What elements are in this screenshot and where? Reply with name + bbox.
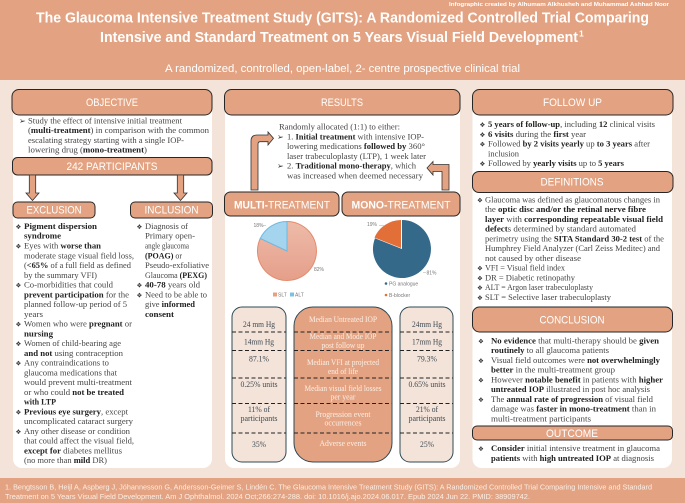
heading: follow up: FOLLOW UP xyxy=(543,97,602,109)
follow up list: ❖ xyxy=(480,121,486,129)
definitions list: ❖ xyxy=(477,196,483,204)
definitions list: DR = Diabetic retinopathy xyxy=(485,272,576,282)
exclusion criteria list: Any contraindications to xyxy=(24,358,110,368)
exclusion criteria list: Previous eye surgery, except xyxy=(24,406,129,416)
title: Intensive and Standard Treatment on 5 Years Visual Field Development xyxy=(100,29,578,46)
outcome text xyxy=(478,443,660,463)
exclusion criteria list: and not using contraception xyxy=(24,348,124,358)
conclusion list: However notable benefit in patients with higher xyxy=(491,374,663,384)
table column: mono-treatment values: 24mm Hg xyxy=(412,319,443,329)
exclusion criteria list: Eyes with worse than xyxy=(24,240,101,250)
pie chart: multi-treatment: 82% xyxy=(314,267,325,273)
arrow: mono-treatment to option 2 xyxy=(427,162,449,190)
definitions list: perimetry using the SITA Standard 30-2 test of the xyxy=(485,233,664,243)
outcome text: Consider initial intensive treatment in glaucoma xyxy=(491,443,660,453)
table column: multi-treatment values: participants xyxy=(240,413,278,423)
follow up list: Followed by 2 visits yearly up to 3 years after xyxy=(488,138,650,148)
heading: objective: OBJECTIVE xyxy=(86,97,138,109)
panel: objective and participants xyxy=(12,90,212,468)
follow up list: 6 visits during the first year xyxy=(488,129,586,139)
table column: outcome labels: Median VFI at projected xyxy=(307,357,380,367)
inclusion criteria list: Diagnosis of xyxy=(145,221,188,231)
title: 1 xyxy=(579,28,584,38)
exclusion criteria list: except for diabetes mellitus xyxy=(24,445,123,455)
pie chart: mono-treatment: 81% xyxy=(426,270,437,276)
exclusion criteria list xyxy=(16,221,134,465)
follow up list: ❖ xyxy=(480,160,486,168)
pie chart: mono-treatment: 19% xyxy=(367,222,378,228)
table column: mono-treatment values: 0.65% units xyxy=(408,379,446,389)
exclusion criteria list: ❖ xyxy=(16,320,22,328)
credit line: Infographic created by Alhumam Alkhusheh and Muhammad Ashhad Noor xyxy=(449,2,670,8)
heading: mono-treatment xyxy=(342,192,460,216)
exclusion criteria list: years xyxy=(24,309,44,319)
pie chart: mono-treatment: B-blocker xyxy=(389,293,410,299)
conclusion list: untreated IOP illustrated in post hoc analysis xyxy=(491,384,651,394)
exclusion criteria list: Any other disease or condition xyxy=(24,426,131,436)
exclusion criteria list: Pigment dispersion xyxy=(24,221,97,231)
inclusion criteria list: angle glaucoma xyxy=(145,240,189,250)
heading: conclusion: CONCLUSION xyxy=(540,314,605,326)
objective text: Study the effect of intensive initial treatment xyxy=(28,115,183,125)
table column: outcome labels: Adverse events xyxy=(320,438,367,448)
arrow: to exclusion xyxy=(26,175,39,200)
exclusion criteria list: Women of child-bearing age xyxy=(24,338,121,348)
arrow: multi-treatment to option 1 xyxy=(251,132,274,190)
follow up list: ❖ xyxy=(480,140,486,148)
table column: outcome labels xyxy=(294,307,392,462)
table column: outcome labels: Progression event xyxy=(316,409,371,419)
exclusion criteria list: moderate stage visual field loss, xyxy=(24,250,134,260)
table column: outcome labels: per year xyxy=(330,392,356,402)
header banner xyxy=(0,0,685,80)
arrow: to inclusion xyxy=(174,175,187,200)
objective text: escalating strategy starting with a single IOP- xyxy=(28,135,184,145)
exclusion criteria list: Women who were pregnant or xyxy=(24,318,132,328)
definitions list: layer with corresponding repeatable visual field xyxy=(485,214,663,224)
randomisation text: lowering medications followed by 360° xyxy=(287,141,426,151)
table column: multi-treatment values: 0.25% units xyxy=(240,379,278,389)
randomisation text: Randomly allocated (1:1) to either: xyxy=(279,122,400,132)
conclusion list: multi-treatment participants xyxy=(491,413,592,423)
exclusion criteria list: prevent participation for the xyxy=(24,289,129,299)
objective text: lowering drug (mono-treatment) xyxy=(28,145,147,155)
definitions list: SLT = Selective laser trabeculoplasty xyxy=(485,292,612,302)
definitions list xyxy=(477,194,664,302)
inclusion criteria list: 40-78 years old xyxy=(145,280,201,290)
conclusion list: ❖ xyxy=(478,357,484,365)
table column: outcome labels: end of life xyxy=(328,366,358,376)
inclusion criteria list: consent xyxy=(145,309,174,319)
exclusion criteria list: that could affect the visual field, xyxy=(24,436,134,446)
conclusion list: routinely to all glaucoma patients xyxy=(491,345,610,355)
conclusion list: ❖ xyxy=(478,337,484,345)
panel: results xyxy=(224,90,460,468)
exclusion criteria list: with LTP xyxy=(24,396,57,406)
table column: outcome labels: Median Untreated IOP xyxy=(309,314,377,324)
randomisation text: laser trabeculoplasty (LTP), 1 week later xyxy=(287,151,426,161)
exclusion criteria list: nursing xyxy=(24,328,54,338)
footer citation: 1. Bengtsson B, Heijl A, Aspberg J, Jóhannesson G, Andersson-Geimer S, Lindén C. The Glaucoma Intensive Treatment Study (GITS): A Randomized Controlled Trial Comparing Intensive and Standard xyxy=(5,484,652,492)
definitions list: ❖ xyxy=(477,274,483,282)
inclusion criteria list xyxy=(136,221,209,319)
randomisation text xyxy=(277,122,426,180)
heading: definitions: DEFINITIONS xyxy=(540,176,604,188)
objective text xyxy=(19,115,210,155)
inclusion criteria list: ❖ xyxy=(136,223,142,231)
inclusion criteria list: Pseudo-exfoliative xyxy=(145,260,209,270)
table column: multi-treatment values: 35% xyxy=(252,439,266,449)
conclusion list: ❖ xyxy=(478,396,484,404)
table column: mono-treatment values: participants xyxy=(408,413,446,423)
heading: 242 participants: 242 PARTICIPANTS xyxy=(66,161,158,173)
randomisation text: ➢ xyxy=(277,162,284,170)
exclusion criteria list: ❖ xyxy=(16,408,22,416)
table column: outcome labels: Median and Mode IOP xyxy=(310,331,377,341)
outcome text: patients with high untreated IOP at diagnosis xyxy=(491,453,655,463)
definitions list: the optic disc and/or the retinal nerve fibre xyxy=(485,204,646,214)
inclusion criteria list: Glaucoma (PEXG) xyxy=(145,270,207,280)
exclusion criteria list: ❖ xyxy=(16,428,22,436)
randomisation text: ➢ xyxy=(277,132,284,141)
randomisation text: was increased when deemed necessary xyxy=(287,170,424,180)
exclusion criteria list: ❖ xyxy=(16,223,22,231)
pie chart: multi-treatment: SLT xyxy=(278,292,287,298)
table column: mono-treatment values xyxy=(400,307,453,462)
heading: follow up xyxy=(472,90,673,115)
inclusion criteria list: ❖ xyxy=(136,291,142,299)
exclusion criteria list: ❖ xyxy=(16,242,22,250)
heading: inclusion xyxy=(130,202,212,218)
follow up list: Followed by yearly visits up to 5 years xyxy=(488,158,625,168)
outcome text: ❖ xyxy=(478,445,484,453)
pie chart: multi-treatment: ALT xyxy=(295,292,304,298)
exclusion criteria list: or who could not be treated xyxy=(24,387,124,397)
heading: objective xyxy=(12,90,212,115)
exclusion criteria list: ❖ xyxy=(16,282,22,290)
inclusion criteria list: (POAG) or xyxy=(145,250,182,260)
exclusion criteria list: ❖ xyxy=(16,340,22,348)
table column: multi-treatment values: 11% of xyxy=(248,404,270,414)
panel: follow up, definitions, conclusion, outcome xyxy=(472,90,673,468)
definitions list: VFI = Visual field index xyxy=(485,262,566,272)
heading: conclusion xyxy=(472,307,672,332)
table column: outcome labels: occurrences xyxy=(324,418,362,428)
heading: exclusion xyxy=(13,202,95,218)
objective text: (multi-treatment) in comparison with the common xyxy=(28,125,210,135)
exclusion criteria list: would prevent multi-treatment xyxy=(24,377,133,387)
heading: multi-treatment: MULTI-TREATMENT xyxy=(234,200,330,212)
inclusion criteria list: Need to be able to xyxy=(145,289,208,299)
exclusion criteria list: planned follow-up period of 5 xyxy=(24,299,127,309)
randomisation text: 2. Traditional mono-therapy, which xyxy=(287,160,417,170)
table column: multi-treatment values xyxy=(232,307,286,462)
conclusion list: ❖ xyxy=(478,376,484,384)
follow up list: 5 years of follow-up, including 12 clinical visits xyxy=(488,119,656,129)
definitions list: ❖ xyxy=(477,294,483,302)
table column: mono-treatment values: 21% of xyxy=(416,404,438,414)
conclusion list: The annual rate of progression of visual field xyxy=(491,394,654,404)
heading: inclusion: INCLUSION xyxy=(144,204,199,216)
exclusion criteria list: glaucoma medications that xyxy=(24,367,118,377)
objective text: ➢ xyxy=(19,116,26,125)
conclusion list xyxy=(478,335,663,423)
pie chart: mono-treatment: PG analogue xyxy=(389,282,418,288)
table column: multi-treatment values: 87.1% xyxy=(249,354,269,364)
conclusion list: Visual field outcomes were not overwhelmingly xyxy=(491,355,661,365)
exclusion criteria list: (no more than mild DR) xyxy=(24,455,107,465)
heading: exclusion: EXCLUSION xyxy=(26,204,82,216)
definitions list: Humphrey Field Analyzer (Carl Zeiss Meditec) and xyxy=(485,243,661,253)
follow up list: inclusion xyxy=(488,148,520,158)
heading: mono-treatment: MONO-TREATMENT xyxy=(352,200,451,212)
exclusion criteria list: uncomplicated cataract surgery xyxy=(24,416,134,426)
table column: outcome labels: Median visual field losses xyxy=(304,383,382,393)
inclusion criteria list: give informed xyxy=(145,299,195,309)
exclusion criteria list: ❖ xyxy=(16,360,22,368)
exclusion criteria list: syndrome xyxy=(24,231,61,241)
pie chart: mono-treatment xyxy=(367,220,437,299)
definitions list: not caused by other disease xyxy=(485,253,581,263)
conclusion list: damage was faster in mono-treatment than in xyxy=(491,404,657,414)
footer citation xyxy=(0,478,685,503)
definitions list: ❖ xyxy=(477,284,483,292)
pie chart: multi-treatment xyxy=(254,221,325,298)
heading: results xyxy=(224,90,460,115)
definitions list: defects determined by standard automated xyxy=(485,224,637,234)
heading: results: RESULTS xyxy=(321,97,363,109)
definitions list: ❖ xyxy=(477,264,483,272)
heading: multi-treatment xyxy=(224,192,339,216)
definitions list: ALT = Argon laser trabeculoplasty xyxy=(485,282,594,292)
table column: mono-treatment values: 25% xyxy=(420,439,434,449)
heading: 242 participants xyxy=(12,158,212,175)
heading: outcome xyxy=(472,426,672,440)
exclusion criteria list: by the summary VFI) xyxy=(24,270,97,280)
exclusion criteria list: (<65% of a full field as defined xyxy=(24,260,132,270)
table column: multi-treatment values: 14mm Hg xyxy=(244,336,275,346)
footer citation: Treatment on 5 Years Visual Field Development. Am J Ophthalmol. 2024 Oct;266:274-288. doi: 10.1016/j.ajo.2024.06.017. Epub 2024 Jun 22. PMID: 38909742. xyxy=(5,494,530,501)
follow up list: ❖ xyxy=(480,131,486,139)
conclusion list: No evidence that multi-therapy should be given xyxy=(491,335,659,345)
definitions list: Glaucoma was defined as glaucomatous changes in xyxy=(485,194,661,204)
table column: outcome labels: post follow up xyxy=(322,340,364,350)
heading: definitions xyxy=(472,172,673,192)
inclusion criteria list: ❖ xyxy=(136,282,142,290)
table column: mono-treatment values: 17mm Hg xyxy=(412,336,443,346)
randomisation text: 1. Initial treatment with intensive IOP- xyxy=(287,131,424,141)
subtitle: A randomized, controlled, open-label, 2- centre prospective clinical trial xyxy=(165,63,520,75)
heading: outcome: OUTCOME xyxy=(546,428,598,440)
title: The Glaucoma Intensive Treatment Study (GITS): A Randomized Controlled Trial Comparing xyxy=(36,10,649,26)
pie chart: multi-treatment: 18% xyxy=(254,223,264,229)
conclusion list: better in the multi-treatment group xyxy=(491,364,615,374)
follow up list xyxy=(480,119,656,168)
title xyxy=(36,10,649,46)
exclusion criteria list: Co-morbidities that could xyxy=(24,280,114,290)
table column: mono-treatment values: 79.3% xyxy=(417,354,437,364)
inclusion criteria list: Primary open- xyxy=(145,231,195,241)
table column: multi-treatment values: 24 mm Hg xyxy=(243,319,276,329)
